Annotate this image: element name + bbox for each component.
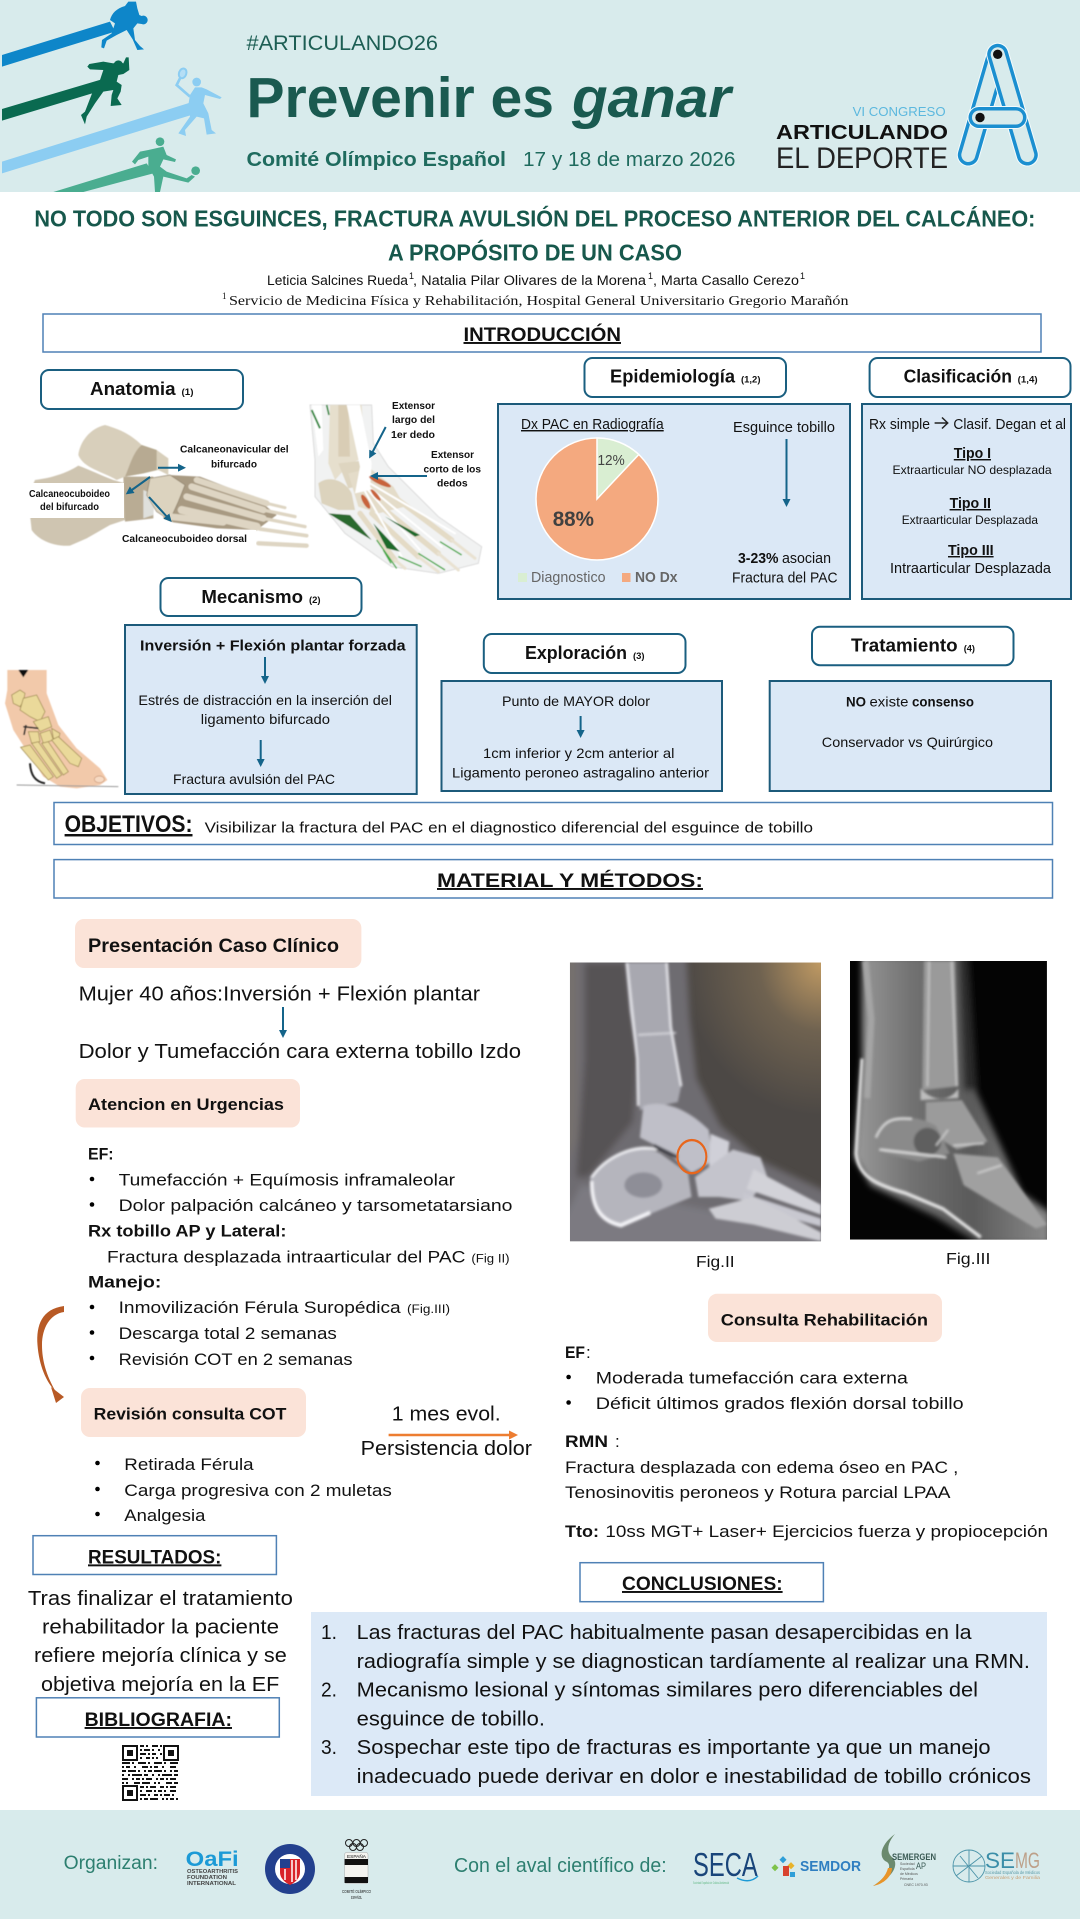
pill heading: Consulta Rehabilitación (721, 1310, 928, 1329)
pie legend: Diagnostico (531, 570, 606, 586)
conclusion 3: Sospechar este tipo de fracturas es importante ya que un manejo (357, 1737, 991, 1759)
affiliation: 1 (222, 291, 226, 301)
type II (902, 496, 1038, 527)
logo: OAFI: INTERNATIONAL (187, 1881, 237, 1887)
heading: mecanismo: Mecanismo (201, 586, 303, 607)
results text: objetiva mejoría en la EF (41, 1674, 279, 1696)
sprain statistic (732, 420, 838, 587)
label: extensor corto: Extensor (431, 449, 474, 461)
football player (53, 137, 200, 192)
case presentation (75, 919, 521, 1063)
pill heading (708, 1294, 942, 1342)
logo: SECA: SECA (693, 1846, 758, 1883)
mechanism stress: ligamento bifurcado (201, 711, 330, 727)
pie chart: 88% (553, 507, 594, 531)
results text: refiere mejoría clínica y se (34, 1645, 287, 1667)
results text: rehabilitador la paciente (42, 1617, 279, 1639)
heading: bibliografia (36, 1698, 279, 1737)
heading: anatomia: Anatomia (90, 378, 176, 399)
panel: conclusiones (311, 1612, 1047, 1796)
conclusion 2: Mecanismo lesional y síntomas similares pero diferenciables del (357, 1680, 978, 1702)
caption: Fig.III (946, 1251, 990, 1268)
exam findings: Déficit últimos grados flexión dorsal tobillo (596, 1394, 964, 1413)
congress slogan: Prevenir es (246, 66, 554, 130)
logo: OAFI: OSTEOARTHRITIS (187, 1869, 238, 1875)
emergency findings: Rx tobillo AP y Lateral: (88, 1221, 286, 1240)
congress slogan (246, 66, 734, 130)
venue and date (246, 149, 736, 171)
logo: SEMERGEN: CNEC 1970-93 (904, 1883, 928, 1887)
logo: SEMERGEN: Española (900, 1867, 915, 1871)
emergency findings: Fractura desplazada intraarticular del PAC (107, 1248, 465, 1266)
heading: conclusiones: CONCLUSIONES: (622, 1573, 783, 1595)
panel: exploracion: Ligamento peroneo astragalino anterior (452, 765, 709, 781)
heading: tratamiento: Tratamiento (851, 635, 958, 656)
title: A PROPÓSITO DE UN CASO (388, 239, 682, 266)
panel: exploracion: 1cm inferior y 2cm anterior al (483, 745, 674, 761)
heading: epidemiologia: (1,2) (741, 375, 760, 386)
conclusion 1 (321, 1622, 1030, 1673)
classification intro: Rx simple (869, 417, 930, 433)
case description: Dolor y Tumefacción cara externa tobillo Izdo (79, 1041, 521, 1063)
logo: OAFI: FOUNDATION (187, 1875, 227, 1881)
logo: Comité Olímpico Español: ESPAÑOL (351, 1894, 362, 1900)
congress wordmark: ARTICULANDO (776, 122, 948, 144)
pie legend (518, 570, 678, 586)
logo: Comité Olímpico Español: COMITÉ OLÍMPICO (342, 1888, 371, 1894)
objetivos bar (54, 802, 1052, 844)
follow-up visit (81, 1388, 392, 1525)
figure: lateral x-ray Fig.III (850, 956, 1050, 1268)
conclusion 2: esguince de tobillo. (357, 1709, 545, 1731)
emergency care (76, 1079, 512, 1369)
conclusion 1: Las fracturas del PAC habitualmente pasan desapercibidas en la (357, 1622, 973, 1644)
heading: clasificacion (870, 358, 1070, 397)
label: calcaneonavicular (180, 444, 289, 471)
label: calcaneocuboideo dorsal: Calcaneocuboideo dorsal (122, 533, 247, 545)
one month evolution note (361, 1402, 532, 1460)
panel: tratamiento: NO (846, 695, 866, 710)
MRI findings (565, 1432, 958, 1502)
logo: SECA (693, 1846, 758, 1885)
authors: , Marta Casallo Cerezo (653, 273, 799, 288)
heading: exploracion: (3) (633, 651, 645, 662)
mechanism result: Fractura avulsión del PAC (173, 771, 335, 787)
logo: SEMG: Sociedad Española de Médicos (985, 1870, 1041, 1875)
runner (2, 57, 129, 124)
case description: Mujer 40 años:Inversión + Flexión plantar (79, 984, 480, 1006)
emergency findings: Descarga total 2 semanas (119, 1324, 337, 1343)
label: extensor corto: corto de los (424, 464, 481, 476)
logo: Comité Olímpico Español: ESPAÑA (347, 1853, 366, 1859)
emergency findings: Revisión COT en 2 semanas (119, 1350, 352, 1369)
pie chart: 12% (598, 453, 625, 469)
exam findings (565, 1343, 964, 1413)
illustration: foot bones with ligaments (21, 425, 307, 548)
case description (79, 984, 521, 1063)
arrow (260, 740, 262, 763)
emergency findings: (Fig.III) (407, 1304, 450, 1316)
panel: tratamiento: existe (870, 695, 908, 710)
congress wordmark: EL DEPORTE (776, 142, 948, 175)
heading: tratamiento (812, 627, 1014, 665)
label: calcaneocuboideo bifurcado: del bifurcado (40, 502, 99, 513)
type I: Tipo I (954, 446, 991, 462)
label: extensor largo: largo del (392, 414, 435, 426)
panel: exploracion: Punto de MAYOR dolor (502, 693, 650, 709)
emergency findings: (Fig II) (471, 1254, 510, 1266)
mechanism stress: Estrés de distracción en la inserción del (138, 692, 392, 708)
hashtag: #ARTICULANDO26 (246, 32, 438, 55)
panel: mecanismo (125, 625, 417, 794)
label: calcaneonavicular: Calcaneonavicular del (180, 444, 289, 456)
type I (892, 446, 1052, 477)
logo: SEMDOR (771, 1856, 861, 1877)
logo: OAFI: OaFi (186, 1848, 239, 1871)
arrows (371, 427, 427, 476)
MRI findings: Fractura desplazada con edema óseo en PAC , (565, 1458, 958, 1477)
follow-up bullets (95, 1455, 392, 1525)
logo: SEMG: MG (1015, 1848, 1040, 1873)
label: extensor largo (391, 400, 435, 441)
conclusion 2: 2. (321, 1680, 337, 1702)
emergency findings: EF: (88, 1145, 114, 1164)
venue and date: Comité Olímpico Español (246, 149, 506, 171)
emergency findings (88, 1145, 512, 1369)
results text (28, 1588, 293, 1696)
conclusion 1: radiografía simple y se diagnostican tardíamente al realizar una RMN. (357, 1651, 1030, 1673)
logo: SECA: Sociedad Española de Calidad Asistencial (693, 1881, 729, 1885)
athlete stripes and silhouettes (2, 2, 222, 192)
heading: material y metodos (54, 860, 1052, 898)
affiliation: Servicio de Medicina Física y Rehabilitación, Hospital General Universitario Gregorio Marañón (229, 294, 848, 309)
label: calcaneocuboideo bifurcado (29, 489, 110, 513)
authors: , Natalia Pilar Olivares de la Morena (413, 273, 647, 288)
exam findings: EF (565, 1343, 585, 1362)
pill heading: Atencion en Urgencias (88, 1095, 284, 1114)
rehabilitation consult (565, 1294, 1048, 1541)
logo: SEMG: SE (985, 1848, 1015, 1873)
illustration: foot inversion (5, 670, 118, 788)
pie chart (536, 438, 658, 560)
figure: lateral x-ray Fig.II (561, 952, 829, 1271)
panel: clasificacion (862, 404, 1071, 599)
pill heading (75, 919, 361, 968)
one month evolution note: Persistencia dolor (361, 1437, 532, 1460)
label: extensor corto (424, 449, 481, 490)
panel: exploracion (442, 681, 722, 791)
fracture marker (677, 1140, 706, 1173)
label box (114, 530, 256, 548)
arrow (264, 657, 266, 680)
venue and date: 17 y 18 de marzo 2026 (523, 149, 736, 171)
logo: Fundación Atlético de Madrid (265, 1844, 315, 1894)
objetivos bar: Visibilizar la fractura del PAC en el diagnostico diferencial del esguince de tobillo (205, 820, 813, 836)
emergency findings: Manejo: (88, 1272, 161, 1292)
QR code (122, 1746, 178, 1800)
heading: introducción: INTRODUCCIÓN (464, 322, 621, 346)
label box (21, 483, 124, 518)
heading: epidemiologia (584, 358, 786, 397)
basketball player (2, 2, 148, 67)
MRI findings: : (615, 1432, 620, 1451)
conclusion 2 (321, 1680, 978, 1731)
emergency findings: Tumefacción + Equímosis inframaleolar (119, 1171, 455, 1190)
MRI findings: Tenosinovitis peroneos y Rotura parcial LPAA (565, 1483, 951, 1502)
logo: SEMERGEN: SEMERGEN (892, 1852, 936, 1862)
follow-up bullets: Analgesia (124, 1506, 206, 1525)
logo: SEMERGEN: Primaria (900, 1877, 913, 1881)
pie legend: NO Dx (635, 570, 678, 586)
heading: exploracion (484, 634, 686, 673)
conclusion 3: 3. (321, 1737, 337, 1759)
treatment: Tto: (565, 1522, 599, 1541)
emergency findings: Inmovilización Férula Suropédica (119, 1298, 401, 1317)
arrow: curved follow-up (37, 1306, 64, 1403)
type I: Extraarticular NO desplazada (892, 463, 1052, 477)
sprain statistic: Esguince tobillo (733, 420, 835, 436)
title (34, 205, 1035, 266)
panel: tratamiento (770, 681, 1051, 791)
label: calcaneonavicular: bifurcado (211, 459, 257, 471)
mechanism cause: Inversión + Flexión plantar forzada (140, 638, 406, 655)
authors (267, 271, 805, 288)
pill heading (76, 1079, 300, 1128)
conclusion 3 (321, 1737, 1031, 1788)
arrows (129, 468, 182, 519)
logo: OAFI (186, 1848, 239, 1887)
logo: SEMERGEN (873, 1834, 936, 1887)
type III: Intraarticular Desplazada (890, 561, 1052, 577)
exam findings: Moderada tumefacción cara externa (596, 1368, 908, 1388)
one month evolution note: 1 mes evol. (392, 1402, 501, 1426)
heading: anatomia: (1) (182, 387, 194, 398)
heading: introducción (43, 314, 1041, 352)
endorsement label: Con el aval científico de: (454, 1855, 667, 1877)
label: extensor corto: dedos (437, 478, 468, 490)
type II: Extraarticular Desplazada (902, 513, 1038, 527)
logo: SEMG: Generales y de Familia (985, 1875, 1041, 1880)
tennis player (2, 67, 222, 173)
caption: Fig.II (696, 1254, 735, 1271)
pill heading: Revisión consulta COT (94, 1404, 287, 1423)
heading: conclusiones (580, 1563, 823, 1602)
conclusion 3: inadecuado puede derivar en dolor e inestabilidad de tobillo crónicos (357, 1766, 1031, 1788)
results text: Tras finalizar el tratamiento (28, 1588, 293, 1610)
authors: Leticia Salcines Rueda (267, 273, 408, 288)
sprain statistic: 3-23% (738, 551, 779, 567)
exam findings: : (586, 1343, 591, 1362)
sprain statistic: Fractura del PAC (732, 571, 838, 587)
authors: 1 (648, 271, 653, 281)
chart title: Dx PAC en Radiografía (521, 417, 665, 433)
heading: tratamiento: (4) (964, 644, 975, 655)
organizers label: Organizan: (64, 1853, 158, 1874)
logo: SEMERGEN: AP (916, 1861, 926, 1871)
authors: 1 (409, 271, 414, 281)
logo: SEMERGEN: Sociedad (900, 1862, 915, 1866)
footer band (0, 1810, 1080, 1919)
logo: SEMDOR: SEMDOR (800, 1858, 861, 1875)
sprain statistic: asocian (782, 551, 831, 567)
follow-up bullets: Retirada Férula (124, 1455, 254, 1474)
illustration: foot extensor muscles (310, 400, 482, 573)
header banner (0, 0, 1080, 192)
heading: clasificacion: Clasificación (904, 366, 1012, 387)
mechanism stress (138, 692, 392, 727)
heading: bibliografia: BIBLIOGRAFIA: (85, 1709, 232, 1731)
heading: material y metodos: MATERIAL Y MÉTODOS: (437, 869, 703, 892)
heading: mecanismo: (2) (309, 595, 321, 606)
heading: resultados (33, 1536, 276, 1574)
heading: epidemiologia: Epidemiología (610, 366, 736, 387)
heading: clasificacion: (1,4) (1018, 375, 1038, 386)
authors: 1 (800, 271, 805, 281)
icon: A logo (968, 50, 1027, 155)
heading: mecanismo (160, 578, 362, 616)
logo: SEMERGEN: de Médicos (900, 1872, 918, 1876)
follow-up bullets: Carga progresiva con 2 muletas (124, 1481, 392, 1500)
heading: exploracion: Exploración (525, 642, 627, 663)
conclusion 1: 1. (321, 1622, 337, 1644)
label: extensor largo: 1er dedo (391, 429, 435, 441)
pill heading (81, 1388, 306, 1437)
treatment: 10ss MGT+ Laser+ Ejercicios fuerza y propiocepción (605, 1522, 1048, 1541)
heading: anatomia (41, 370, 243, 409)
classification intro (869, 417, 1066, 433)
label: extensor largo: Extensor (392, 400, 435, 412)
type II: Tipo II (950, 496, 991, 512)
panel: epidemiologia (498, 404, 850, 599)
classification intro: Clasif. Degan et al (953, 417, 1066, 433)
pill heading: Presentación Caso Clínico (88, 935, 339, 957)
congress slogan: ganar (571, 66, 734, 130)
objetivos bar: OBJETIVOS: (65, 811, 192, 838)
congress wordmark: VI CONGRESO (853, 104, 946, 119)
emergency findings: Dolor palpación calcáneo y tarsometatarsiano (119, 1196, 512, 1215)
panel: tratamiento: consenso (912, 695, 974, 710)
panel: tratamiento: Conservador vs Quirúrgico (822, 734, 993, 750)
congress wordmark (776, 104, 948, 175)
type III (890, 543, 1052, 577)
type III: Tipo III (948, 543, 994, 559)
MRI findings: RMN (565, 1432, 608, 1451)
logo: Comité Olímpico Español (342, 1840, 371, 1900)
heading: resultados: RESULTADOS: (88, 1546, 221, 1568)
logo: SEMG (953, 1848, 1041, 1882)
label: calcaneocuboideo bifurcado: Calcaneocuboideo (29, 489, 110, 500)
